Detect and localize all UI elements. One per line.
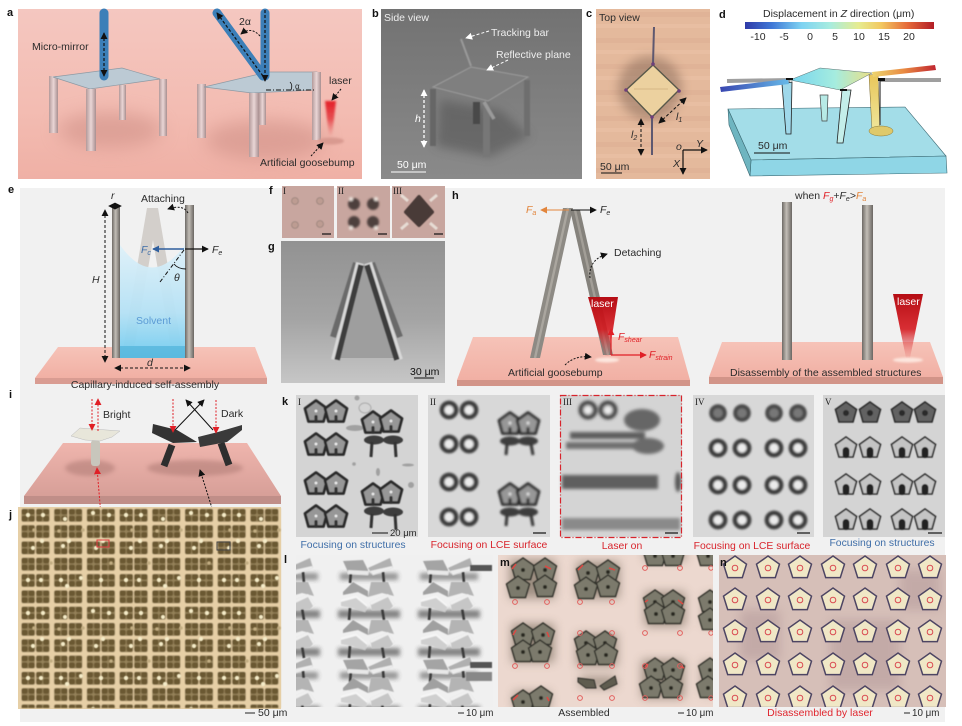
right scene: > bbox=[850, 190, 856, 202]
panel: lower grey background bbox=[20, 188, 945, 722]
panel letters: b bbox=[372, 8, 379, 20]
panel letters: n bbox=[720, 557, 727, 569]
panel b: SEM side view: Side view bbox=[384, 12, 429, 24]
panel e: capillary self-assembly: θ bbox=[174, 272, 180, 284]
panel e: capillary self-assembly: e bbox=[218, 250, 222, 257]
panel a: micro-mirror schematic: Artificial goosebump bbox=[260, 157, 355, 169]
panel c: top view micrograph: 50 μm bbox=[600, 161, 630, 173]
panel c: top view micrograph: o bbox=[676, 141, 682, 153]
panel f: micrographs I to III: III bbox=[393, 186, 402, 196]
panel m: assembled micrograph: 10 μm bbox=[686, 708, 713, 719]
left scene: F bbox=[600, 204, 606, 216]
panel c: top view micrograph: Y bbox=[696, 138, 704, 150]
dark structure bbox=[152, 424, 242, 466]
k III: laser on: III bbox=[563, 397, 572, 407]
right table bbox=[197, 72, 321, 157]
k IV: focusing on LCE surface bbox=[693, 395, 814, 537]
panel k: time sequence micrographs bbox=[296, 395, 945, 552]
panel letters: k bbox=[282, 396, 289, 408]
right scene: Disassembly of the assembled structures bbox=[730, 367, 921, 379]
panel letters: l bbox=[284, 554, 287, 566]
panel e: capillary self-assembly: F bbox=[141, 244, 147, 256]
panel d: displacement simulation: Displacement in Z direction (μm) bbox=[763, 8, 914, 20]
panel n: disassembled micrograph bbox=[719, 555, 946, 719]
panel c: top view micrograph: l bbox=[676, 111, 678, 123]
panel letters bbox=[7, 7, 727, 569]
panel letters: f bbox=[269, 185, 273, 197]
panel c: top view micrograph: X bbox=[672, 158, 681, 170]
panel i: bright and dark optical schematic bbox=[24, 399, 281, 540]
beams bbox=[104, 10, 314, 90]
panel b: SEM side view bbox=[381, 9, 582, 179]
left scene: strain bbox=[655, 355, 673, 362]
light path arrows bbox=[92, 399, 222, 540]
panel letters: g bbox=[268, 241, 275, 253]
panel letters: e bbox=[8, 184, 14, 196]
colour bar: 15 bbox=[878, 31, 890, 43]
panel g: SEM of assembled pair: 30 μm bbox=[410, 366, 440, 378]
right scene bbox=[709, 190, 943, 384]
panel d: displacement simulation: 50 μm bbox=[758, 140, 788, 152]
left table bbox=[49, 68, 167, 151]
panel letters: d bbox=[719, 9, 726, 21]
k IV: focusing on LCE surface: IV bbox=[695, 397, 705, 407]
panel d: displacement simulation bbox=[720, 8, 947, 176]
colour bar: 20 bbox=[903, 31, 915, 43]
left scene bbox=[457, 204, 690, 386]
panel e: capillary self-assembly: F bbox=[212, 244, 218, 256]
panel h: detaching by laser bbox=[457, 190, 943, 386]
left scene: Detaching bbox=[614, 247, 661, 259]
colour bar: 10 bbox=[853, 31, 865, 43]
colour bar bbox=[745, 22, 934, 43]
right scene: + bbox=[833, 190, 840, 202]
colour bar: 5 bbox=[832, 31, 838, 43]
panel f: micrographs I to III bbox=[282, 186, 445, 238]
colour bar: -10 bbox=[750, 31, 766, 43]
panel j: large area array micrograph bbox=[18, 507, 288, 719]
panel letters: j bbox=[8, 509, 12, 521]
k V: focusing on structures bbox=[823, 395, 945, 537]
laser and goosebump bbox=[311, 89, 344, 156]
k I: focusing on structures: 20 μm bbox=[390, 528, 417, 539]
panel j: large area array micrograph: 50 μm bbox=[258, 707, 288, 719]
k captions: Focusing on structures bbox=[829, 538, 935, 549]
right scene: g bbox=[829, 196, 833, 203]
panel e: capillary self-assembly bbox=[35, 190, 267, 391]
panel b: SEM side view: Tracking bar bbox=[491, 27, 549, 39]
panel e: capillary self-assembly: d bbox=[147, 357, 154, 369]
panel m: assembled micrograph bbox=[498, 555, 713, 718]
left scene: Artificial goosebump bbox=[508, 367, 603, 379]
panel e: capillary self-assembly: H bbox=[92, 274, 100, 286]
panel n: disassembled micrograph: Disassembled by laser bbox=[767, 707, 873, 719]
left scene: e bbox=[606, 210, 610, 217]
force arrows bbox=[105, 206, 208, 368]
right scene: laser bbox=[897, 296, 920, 308]
left scene: laser bbox=[591, 298, 614, 310]
panel letters: h bbox=[452, 190, 459, 202]
panel c: top view micrograph: Top view bbox=[599, 12, 640, 24]
panel g: SEM of assembled pair bbox=[281, 241, 445, 383]
colour bar: 0 bbox=[807, 31, 813, 43]
panel e: capillary self-assembly: r bbox=[111, 190, 115, 202]
panel letters: a bbox=[7, 7, 14, 19]
panel f: micrographs I to III: I bbox=[283, 186, 286, 196]
k captions: Focusing on LCE surface bbox=[694, 541, 811, 552]
right scene: e bbox=[846, 196, 850, 203]
panel i: bright and dark optical schematic: Bright bbox=[103, 409, 131, 421]
panel i: bright and dark optical schematic: Dark bbox=[221, 408, 244, 420]
panel e: capillary self-assembly: Solvent bbox=[136, 315, 171, 327]
panel l: SEM tilted array bbox=[296, 558, 493, 718]
panel c: top view micrograph: l bbox=[631, 129, 633, 141]
panel e: capillary self-assembly: c bbox=[147, 250, 151, 257]
right scene: F bbox=[856, 190, 866, 203]
panel a: micro-mirror schematic: α bbox=[295, 82, 300, 91]
k V: focusing on structures: V bbox=[825, 397, 832, 407]
colour bar: -5 bbox=[779, 31, 789, 43]
k I: focusing on structures: I bbox=[298, 397, 301, 407]
k captions: Focusing on structures bbox=[300, 540, 406, 551]
panel l: SEM tilted array: 10 μm bbox=[466, 708, 493, 719]
panel a: micro-mirror schematic: Micro-mirror bbox=[32, 41, 89, 53]
substrate bbox=[728, 107, 947, 176]
panel f: micrographs I to III: II bbox=[338, 186, 344, 196]
left scene: F bbox=[618, 331, 624, 343]
panel e: capillary self-assembly: Capillary-induced self-assembly bbox=[71, 379, 220, 391]
panel letters: m bbox=[500, 557, 510, 569]
panel a: micro-mirror schematic bbox=[18, 9, 362, 179]
left scene: shear bbox=[624, 337, 643, 344]
k captions bbox=[300, 538, 935, 552]
deformed structure bbox=[720, 65, 941, 143]
panel b: SEM side view: Reflective plane bbox=[496, 49, 571, 61]
left scene: F bbox=[526, 204, 532, 216]
panel e: capillary self-assembly: Attaching bbox=[141, 193, 185, 205]
right scene: when F bbox=[795, 190, 829, 202]
panel c: top view micrograph: 2 bbox=[632, 135, 637, 142]
panel letters: c bbox=[586, 8, 592, 20]
k II: focusing on LCE surface: II bbox=[430, 397, 436, 407]
panel m: assembled micrograph: Assembled bbox=[558, 708, 610, 719]
right scene: F bbox=[840, 190, 850, 203]
k captions: Laser on bbox=[602, 541, 642, 552]
k III: laser on bbox=[560, 395, 682, 538]
panel b: SEM side view: 50 μm bbox=[397, 159, 427, 171]
panel c: top view micrograph: 1 bbox=[678, 117, 682, 124]
right scene: a bbox=[862, 196, 866, 203]
panel a: micro-mirror schematic: laser bbox=[329, 75, 352, 87]
panel b: SEM side view: h bbox=[415, 113, 421, 125]
panel letters: i bbox=[9, 389, 12, 401]
k I: focusing on structures bbox=[296, 395, 418, 539]
k captions: Focusing on LCE surface bbox=[431, 540, 548, 551]
panel n: disassembled micrograph: 10 μm bbox=[912, 708, 939, 719]
k II: focusing on LCE surface bbox=[428, 395, 550, 537]
panel c: top view micrograph bbox=[596, 9, 710, 179]
left scene: a bbox=[532, 210, 536, 217]
panel a: micro-mirror schematic: 2α bbox=[239, 16, 251, 28]
left scene: F bbox=[649, 349, 655, 361]
bright structure bbox=[71, 428, 120, 466]
